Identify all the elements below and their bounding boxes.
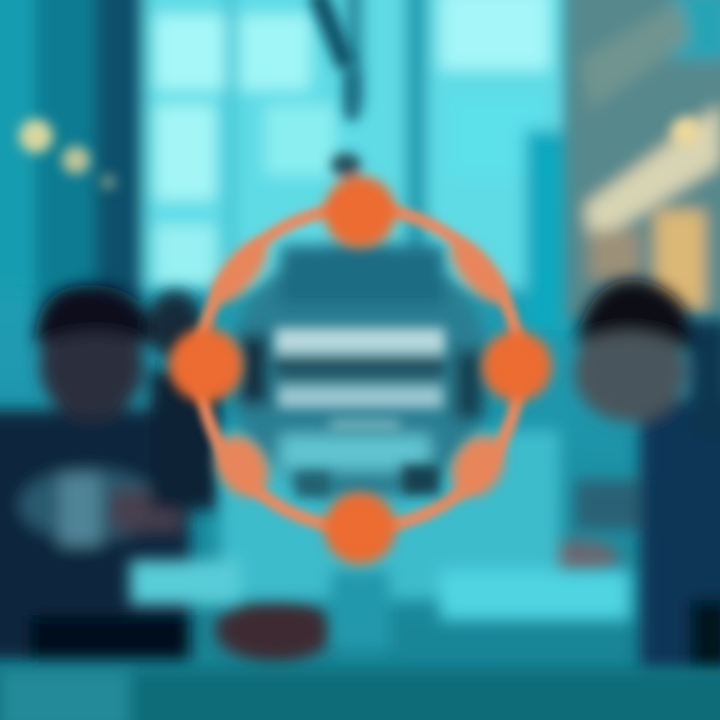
node: top	[324, 153, 396, 248]
person on the left	[0, 285, 335, 662]
background: building on the right	[565, 0, 720, 320]
background: string lights	[19, 0, 701, 190]
background: bright windows	[0, 0, 570, 330]
ring secondary segments	[203, 233, 515, 506]
node: bottom	[324, 492, 396, 564]
diagram ring	[200, 208, 520, 528]
node: right	[482, 331, 552, 401]
diagram inner backdrop	[230, 240, 490, 500]
circular diagram	[169, 153, 552, 564]
table in the foreground	[0, 430, 720, 720]
central title block	[275, 328, 445, 497]
node: left	[169, 328, 243, 402]
person on the right	[520, 280, 720, 670]
